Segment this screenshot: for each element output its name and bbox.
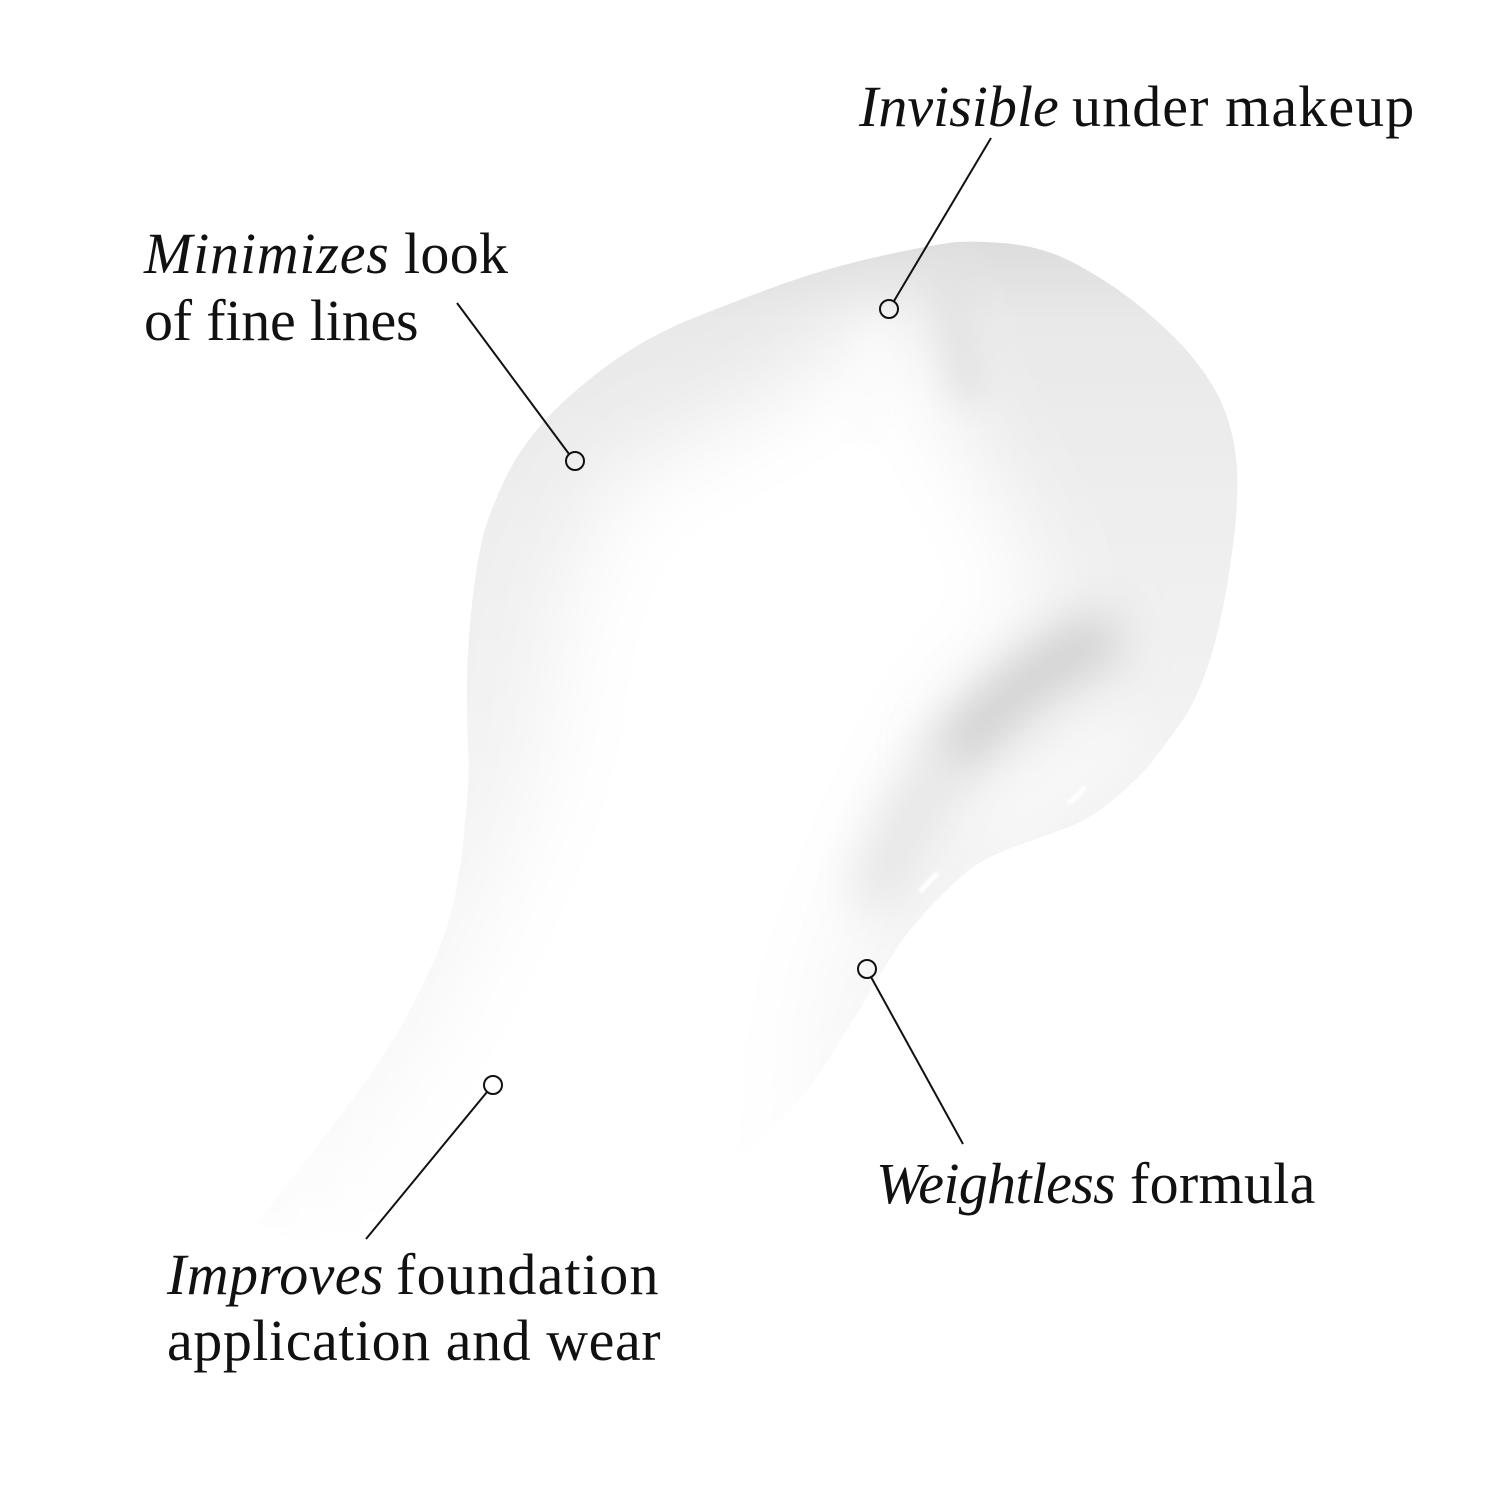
callout: weightless formula: Weightless: [876, 1151, 1115, 1216]
callout: minimizes look of fine lines: of fine lines: [144, 288, 418, 353]
callout: weightless formula: [858, 960, 1316, 1216]
callout: improves foundation application and wear: Improves: [166, 1242, 384, 1307]
callout: invisible under makeup: [858, 74, 1415, 318]
callout: minimizes look of fine lines: Minimizes: [143, 221, 390, 286]
callout: improves foundation application and wear: foundation: [396, 1242, 660, 1307]
callout: weightless formula: formula: [1130, 1151, 1316, 1216]
callout: minimizes look of fine lines: [143, 221, 584, 470]
callout: invisible under makeup: Invisible: [858, 74, 1059, 139]
callout: invisible under makeup: under makeup: [1072, 74, 1415, 139]
callout: improves foundation application and wear: [166, 1076, 661, 1373]
infographic canvas: [143, 86, 1412, 1372]
cream swatch: [455, 242, 1238, 967]
callout: improves foundation application and wear: application and wear: [167, 1308, 661, 1373]
callout: minimizes look of fine lines: look: [404, 221, 508, 286]
